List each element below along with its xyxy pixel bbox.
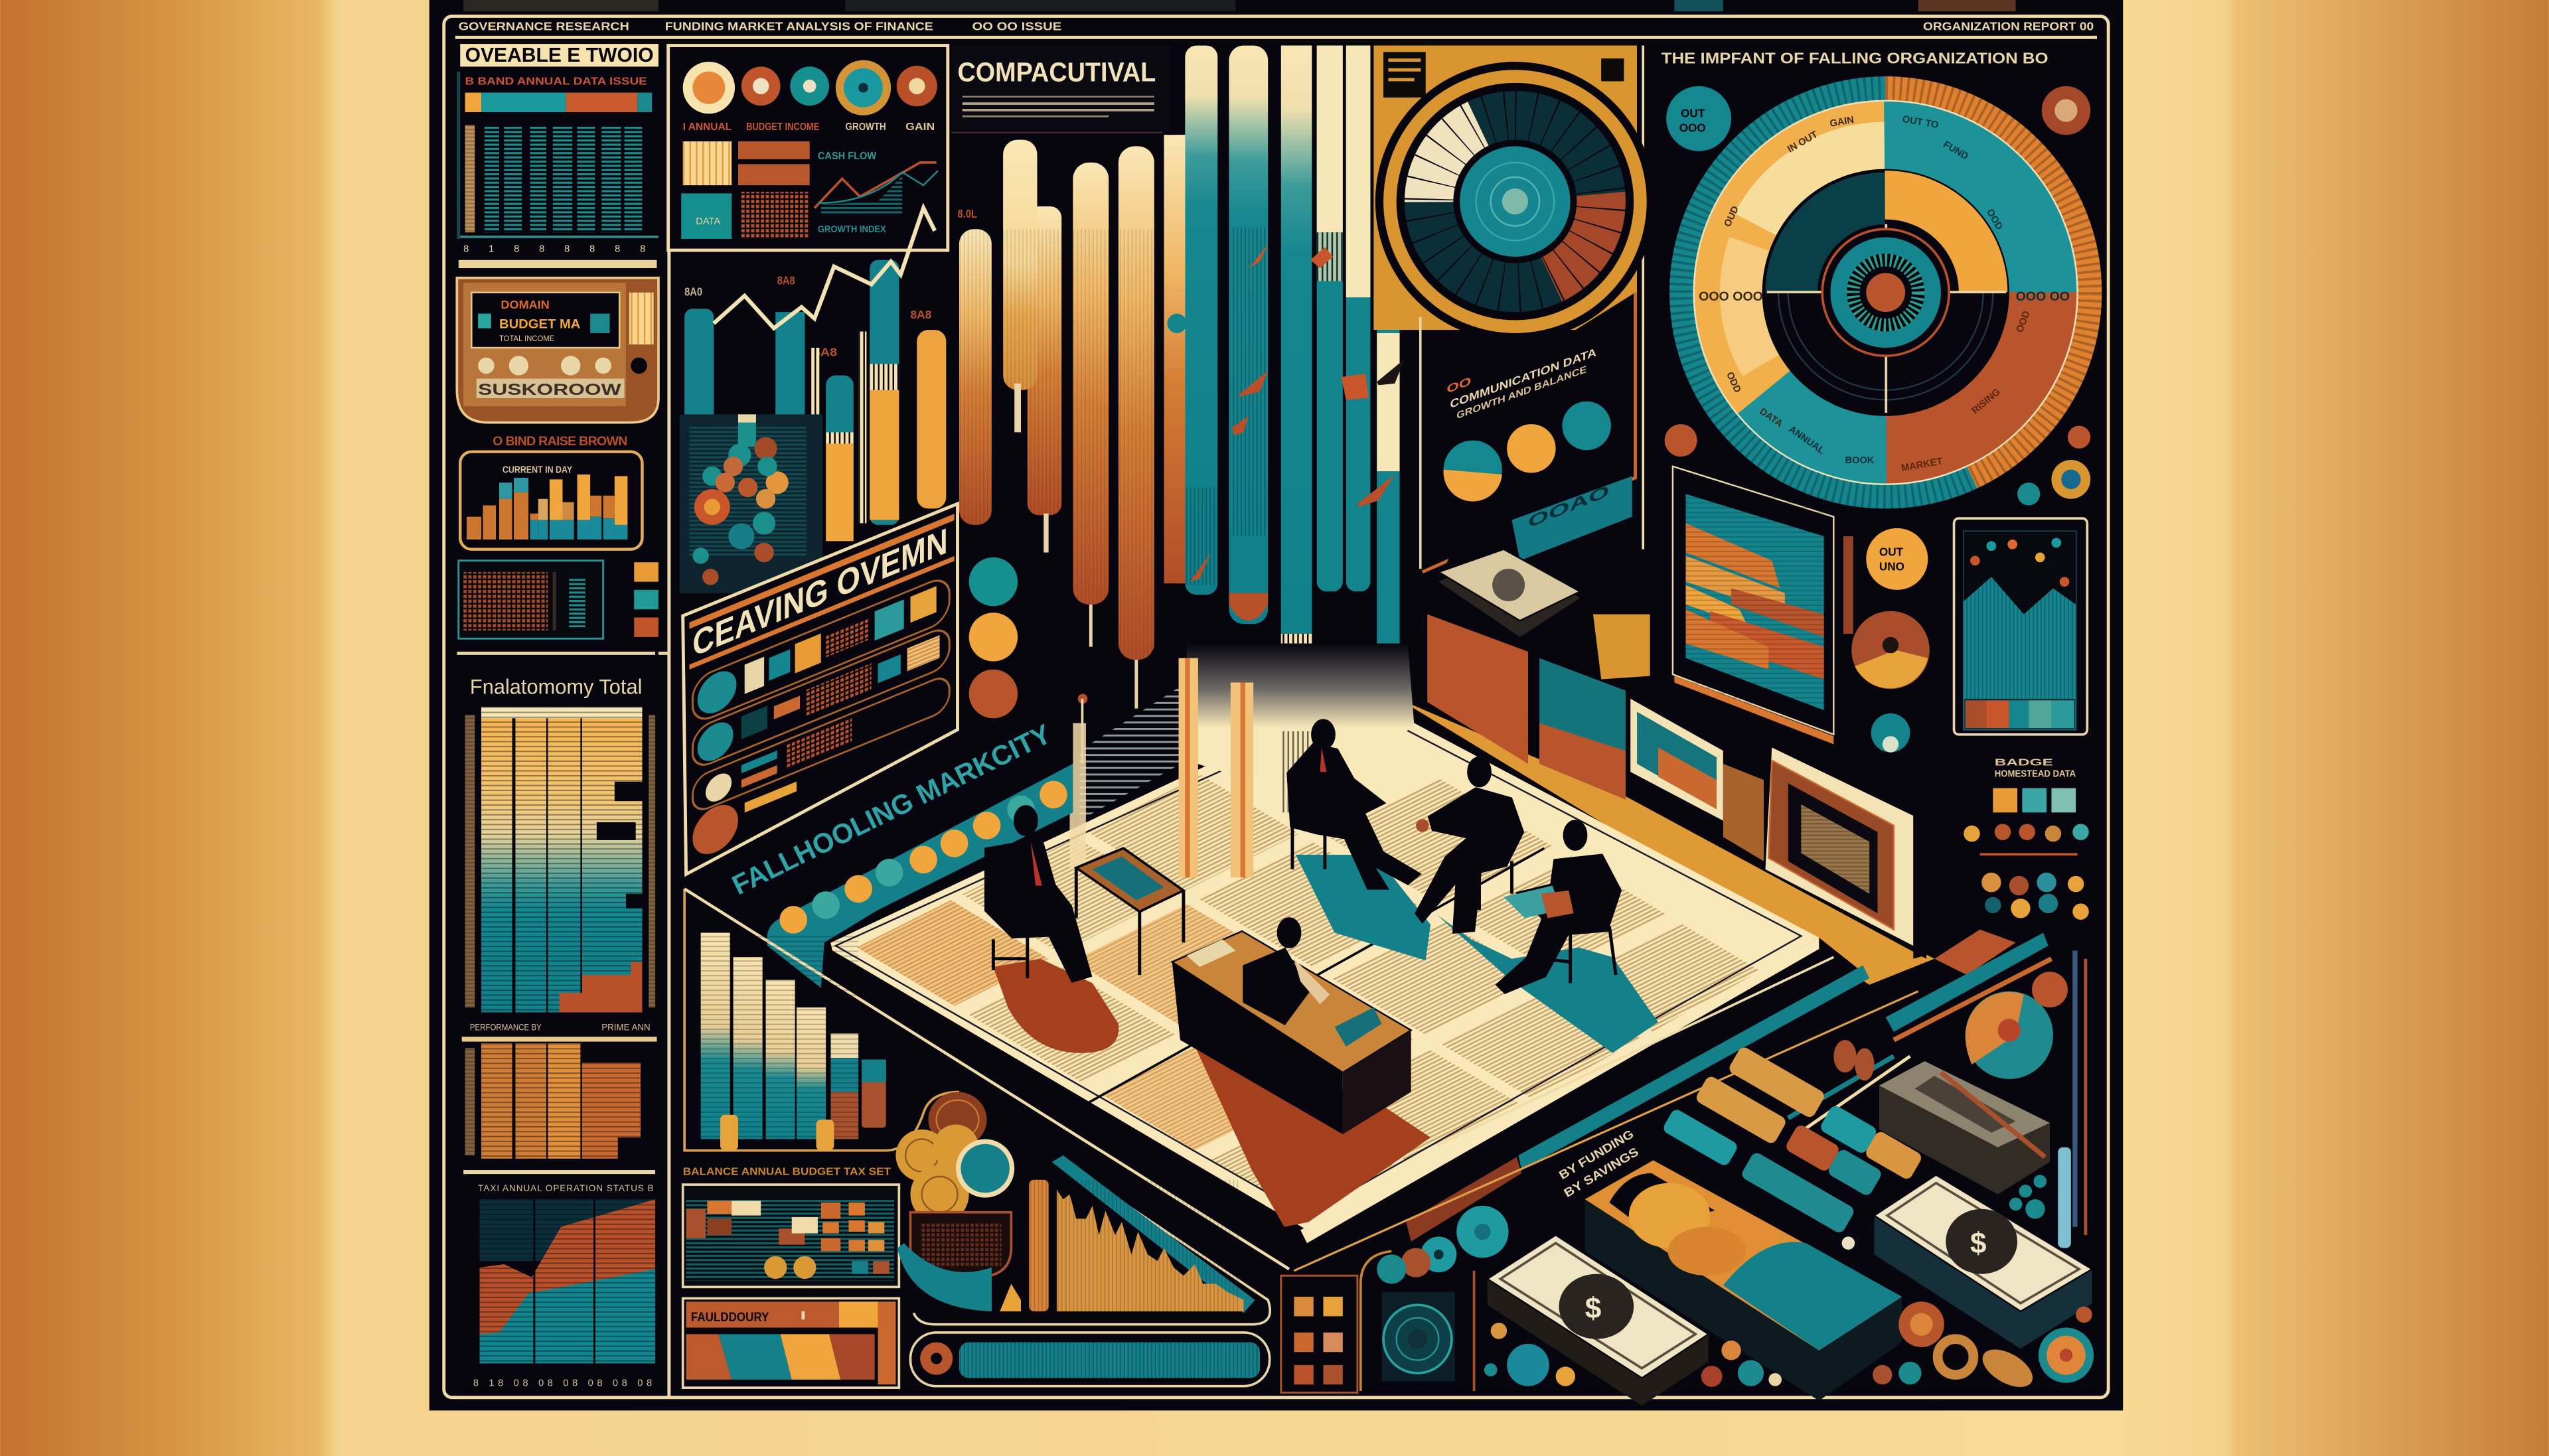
panel: skewed three-circle legend: OO xyxy=(1447,374,1471,396)
heading: impact of falling organization: THE IMPFANT OF FALLING ORGANIZATION BO xyxy=(1661,49,2048,66)
chart: big quadrant donut: BOOK xyxy=(1845,455,1875,466)
bar chart with rising line: 8A8 xyxy=(911,308,931,321)
bar chart: tall teal columns xyxy=(1164,46,1405,744)
icons: orange badge and brown disc xyxy=(1843,528,1930,753)
figure: seated person back xyxy=(1289,721,1417,887)
panel: right legend block xyxy=(1964,757,2089,920)
icon: grey wrapped stack xyxy=(1879,1061,2050,1195)
icons: side circles xyxy=(969,557,1018,718)
panel: retro device: DOMAIN xyxy=(501,298,550,311)
header strip small text: GOVERNANCE RESEARCH xyxy=(459,19,629,33)
panel: overable table xyxy=(457,44,658,268)
icons: donut side badges: OUT xyxy=(1681,106,1705,119)
chart: big quadrant donut xyxy=(1665,72,2107,514)
figure: seated person right xyxy=(1499,822,1619,991)
panel: five-circle dashboard xyxy=(668,46,948,250)
panel: retro device: SUSKOROOW xyxy=(478,381,622,399)
panel: mini stacked bar chart xyxy=(460,452,642,549)
big desk with figure xyxy=(1172,920,1411,1134)
shadows on floor xyxy=(993,855,1658,1227)
chart: big quadrant donut: ANNUAL xyxy=(1786,424,1826,457)
panel: five-circle dashboard: CASH FLOW xyxy=(818,151,876,162)
icon: mosaic of coins xyxy=(680,414,822,593)
panel: skewed three-circle legend: OOAO xyxy=(1528,482,1609,532)
heading: ceaving ovemn: CEAVING OVEMN xyxy=(692,520,948,664)
teal strip along stage edge xyxy=(1294,933,2051,1271)
panel: area chart: 8 18 08 08 08 08 08 08 xyxy=(473,1378,652,1389)
title: compacutival xyxy=(951,46,1170,133)
bar chart: hanging gradient columns xyxy=(959,135,1199,709)
panel: retro device: BUDGET MA xyxy=(499,317,580,332)
panel: right legend block: BADGE xyxy=(1995,757,2053,768)
panel: overable table: B BAND ANNUAL DATA ISSUE xyxy=(465,76,647,87)
chart: big quadrant donut: GAIN xyxy=(1829,115,1855,129)
icons: donut side badges: OOO xyxy=(1679,121,1706,134)
icon: orange and teal book xyxy=(1585,1160,1902,1401)
icons: gold and teal rolls xyxy=(1661,1040,1924,1234)
icons: orange badge and brown disc: UNO xyxy=(1879,559,1904,573)
panel: area chart xyxy=(473,1183,655,1389)
chart: big quadrant donut: RISING xyxy=(1970,387,2003,416)
heading: Fnalatomomy Total xyxy=(470,675,642,699)
panel: teal spike chart xyxy=(1954,518,2087,735)
bar chart: descending columns xyxy=(684,889,1289,1269)
panel: right legend block: HOMESTEAD DATA xyxy=(1995,768,2076,779)
panel: square legend grid xyxy=(1281,1275,1357,1393)
icon: orange circle xyxy=(1507,424,1556,473)
chart: big quadrant donut: OOD xyxy=(2015,309,2033,334)
chart: spiky orange triangle xyxy=(897,1155,1270,1325)
icon: cash stack on desk xyxy=(1438,549,1580,637)
icon: cash stack right: $ xyxy=(1970,1227,1987,1260)
panel: five-circle dashboard: BUDGET INCOME xyxy=(746,121,819,133)
icons: donut side badges xyxy=(1665,86,2090,506)
panel: orange ribbon block: FAULDDOURY xyxy=(691,1310,769,1325)
panel: colour block table xyxy=(683,1166,899,1287)
chart: big quadrant donut: OUD xyxy=(1723,204,1741,229)
bar chart with rising line: 8A8 xyxy=(777,274,795,287)
icons: scattered bottom coins xyxy=(1484,1175,2094,1395)
caption: red label row: O BIND RAISE BROWN xyxy=(493,434,627,449)
panel: finance total stacked columns xyxy=(465,675,655,1032)
icon: coin pile and bowl xyxy=(895,1092,1014,1277)
teal strip along stage edge: BY FUNDING xyxy=(1557,1127,1636,1182)
bar chart with rising line: 8A8 xyxy=(813,345,837,358)
panel: five-circle dashboard: GAIN xyxy=(905,121,935,133)
small side table xyxy=(1076,848,1184,975)
panel: colour block table: BALANCE ANNUAL BUDGET TAX SET xyxy=(683,1166,891,1177)
panel: skewed three-circle legend: GROWTH AND BALANCE xyxy=(1456,364,1586,421)
chart: big quadrant donut: DATA xyxy=(1757,406,1785,430)
teal strip along stage edge: BY SAVINGS xyxy=(1561,1145,1641,1200)
heading: falling market: FALLHOOLING MARKCITY xyxy=(727,717,1056,901)
chart: big quadrant donut: OOO OO xyxy=(2016,289,2070,304)
header strip small text: ORGANIZATION REPORT 00 xyxy=(1923,19,2094,33)
panel: retro device: TOTAL INCOME xyxy=(499,334,554,343)
hatched backdrop fade xyxy=(1069,644,1415,877)
icon: blue and orange circle xyxy=(1444,441,1502,502)
bar chart with rising line: 8.0L xyxy=(958,207,977,220)
icon: cash stack right xyxy=(1875,1175,2092,1348)
panel: finance total stacked columns: PRIME ANN xyxy=(601,1022,651,1032)
panel: skewed three-circle legend xyxy=(1419,293,1636,617)
panel: falling market banner xyxy=(683,504,958,874)
chart: mid gauge dial xyxy=(1373,46,1655,341)
panel: orange column chart xyxy=(462,1037,657,1174)
chart: big quadrant donut: FUND xyxy=(1941,139,1970,162)
icons: orange badge and brown disc: OUT xyxy=(1879,545,1904,558)
chart: big quadrant donut: OUT TO xyxy=(1901,114,1940,131)
back desk and monitors xyxy=(1398,590,2016,985)
poster frame xyxy=(429,0,2123,1410)
panel: striped tablet xyxy=(1673,467,1833,744)
panel: small data table xyxy=(457,561,668,655)
bar chart with rising line xyxy=(684,207,977,551)
stage floor xyxy=(824,694,1866,1283)
icon: teal circle xyxy=(1562,401,1611,450)
icon: round dial panel xyxy=(1361,1206,1509,1391)
panel: area chart: TAXI ANNUAL OPERATION STATUS B xyxy=(478,1183,654,1193)
panel: five-circle dashboard: GROWTH INDEX xyxy=(818,224,886,235)
heading: table title: OVEABLE E TWOIO xyxy=(465,44,654,66)
chart: big quadrant donut: IN OUT xyxy=(1786,129,1819,155)
panel: five-circle dashboard: DATA xyxy=(696,216,720,227)
chart: big quadrant donut: ODD xyxy=(1724,370,1742,394)
header strip small text xyxy=(459,19,2094,33)
icon: cash stack left xyxy=(1488,1235,1709,1406)
chart: big quadrant donut: OOD xyxy=(1984,207,2005,232)
figure: seated person centre xyxy=(1416,759,1521,931)
panel: overable table: 8 1 8 8 8 8 8 8 xyxy=(463,244,645,255)
teal banner with coins xyxy=(684,699,1073,988)
panel: finance total stacked columns: PERFORMANCE BY xyxy=(470,1022,542,1032)
header strip small text: OO OO ISSUE xyxy=(972,19,1061,33)
title: compacutival: COMPACUTIVAL xyxy=(958,56,1156,87)
figure: seated person left xyxy=(987,808,1089,980)
panel: retro device xyxy=(457,278,658,423)
icon: globe disc xyxy=(1941,950,2087,1248)
panel: five-circle dashboard: I ANNUAL xyxy=(683,121,732,133)
bar chart with rising line: 8A0 xyxy=(684,285,702,299)
panel: mini stacked bar chart: CURRENT IN DAY xyxy=(502,465,572,476)
pill progress bar xyxy=(911,1333,1270,1386)
chart: big quadrant donut: MARKET xyxy=(1900,456,1944,474)
chart: big quadrant donut: OOO OOO xyxy=(1699,289,1763,304)
panel: skewed three-circle legend: COMMUNICATION DATA xyxy=(1450,345,1596,411)
panel: five-circle dashboard: GROWTH xyxy=(846,121,886,133)
header strip small text: FUNDING MARKET ANALYSIS OF FINANCE xyxy=(665,19,933,33)
icon: cash stack left: $ xyxy=(1585,1292,1601,1325)
panel: orange ribbon block xyxy=(683,1298,899,1388)
figure: person at desk xyxy=(1245,920,1307,1022)
